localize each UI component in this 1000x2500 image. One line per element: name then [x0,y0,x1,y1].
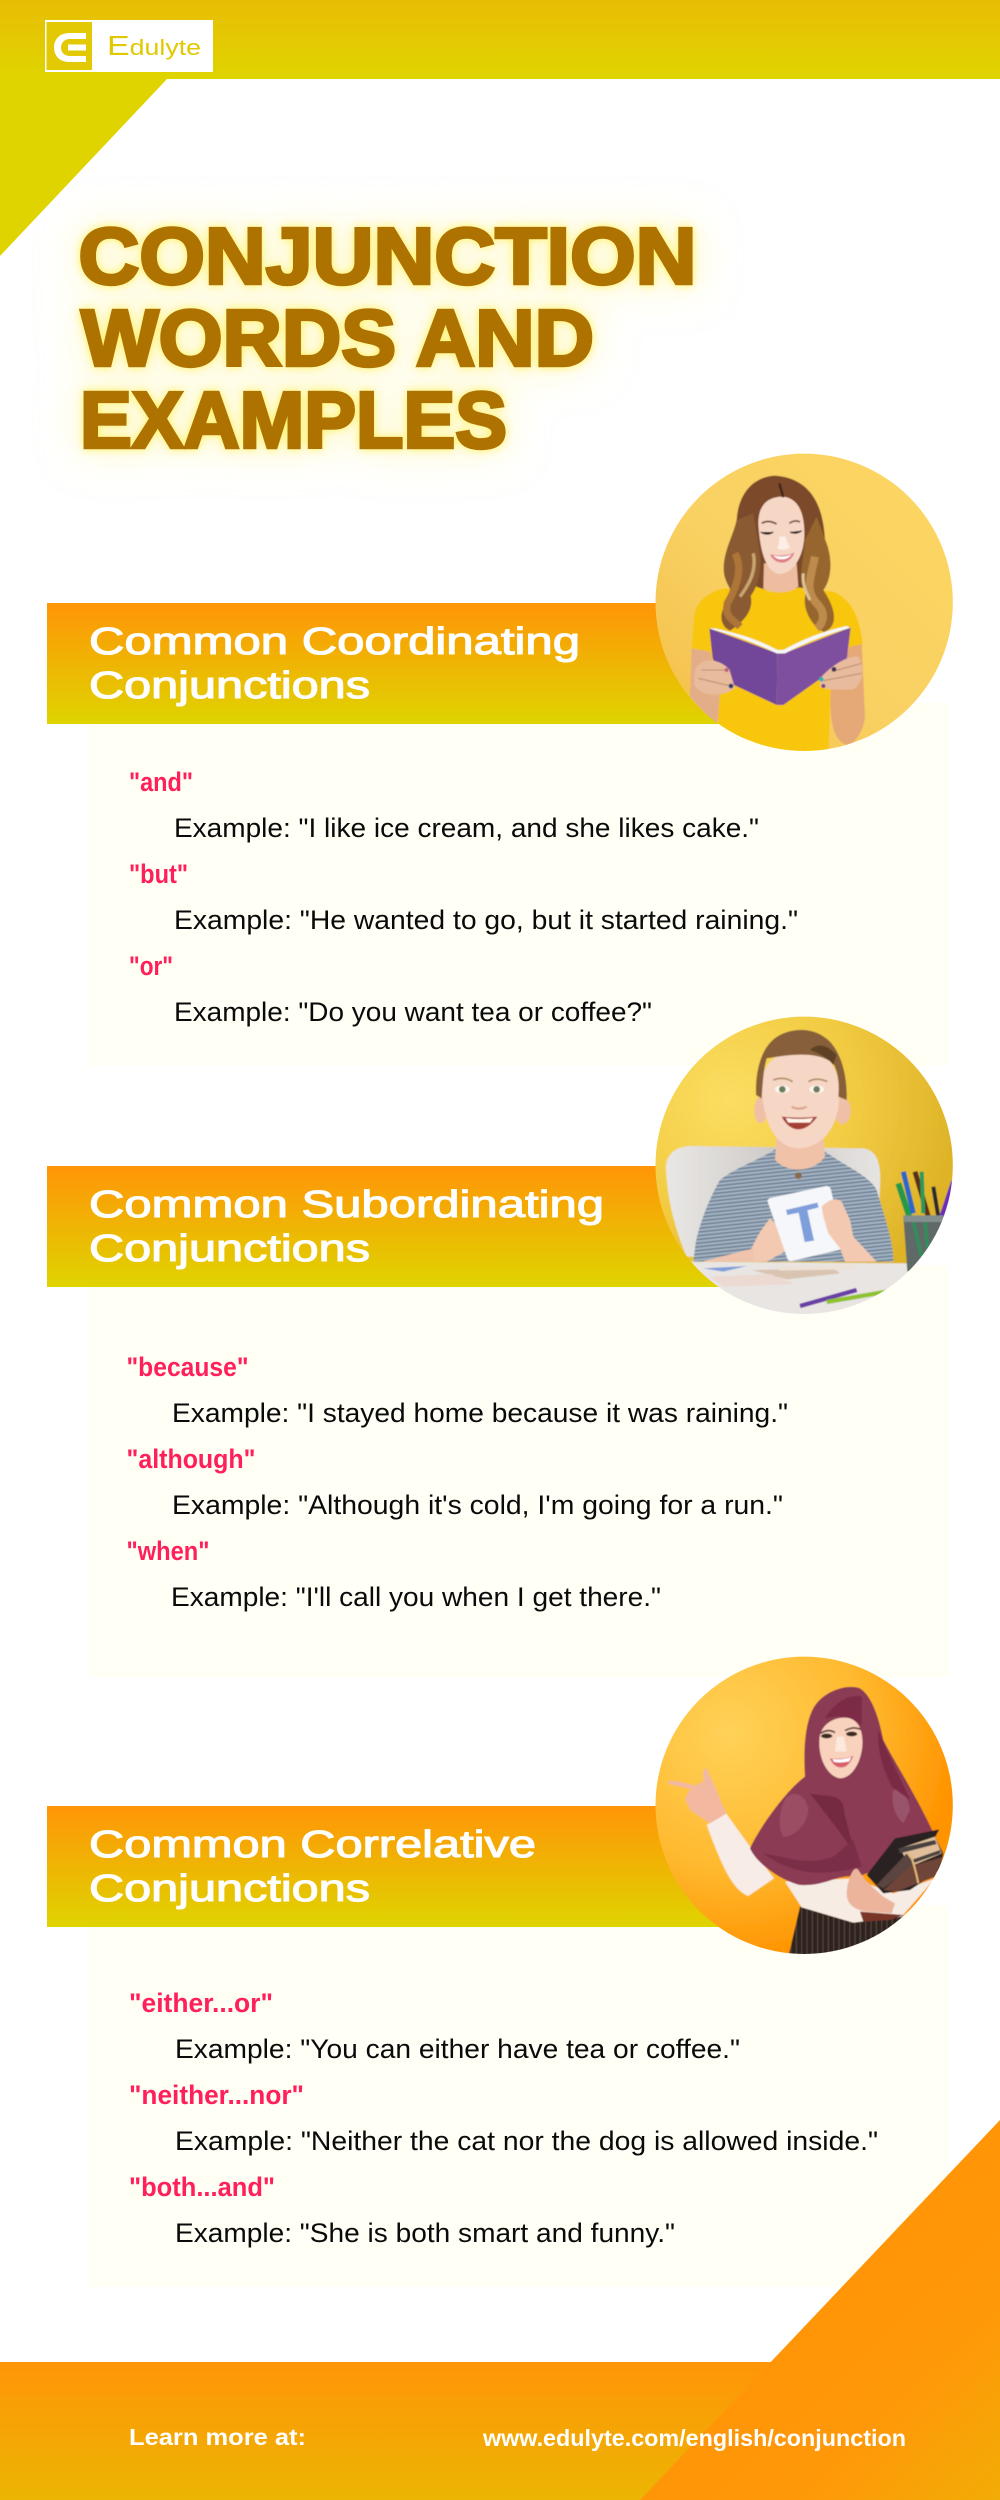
word list: correlative: "either...or" [129,1988,273,2018]
heading band: subordinating [47,1166,767,1287]
word list: coordinating: Example: "I like ice cream, and she likes cake." [174,813,759,843]
word list: correlative [129,1988,878,2248]
heading band: subordinating: Conjunctions [89,1228,370,1270]
word list: subordinating: "because" [126,1352,248,1382]
top-left corner triangle [0,79,167,256]
word list: subordinating: Example: "Although it's cold, I'm going for a run." [172,1490,783,1520]
word list: correlative: Example: "You can either have tea or coffee." [175,2034,740,2064]
header band [0,0,1000,79]
word list: correlative: Example: "She is both smart and funny." [175,2218,675,2248]
heading band: coordinating: Conjunctions [89,665,370,707]
word list: correlative: "neither...nor" [129,2080,304,2110]
heading band: coordinating: Common Coordinating [89,621,580,663]
title [78,212,696,464]
word list: correlative: Example: "Neither the cat nor the dog is allowed inside." [175,2126,878,2156]
title: CONJUNCTION [78,212,696,300]
heading band: correlative: Conjunctions [89,1868,370,1910]
word list: subordinating: "although" [126,1444,256,1474]
word list: subordinating: "when" [126,1536,210,1566]
photo: woman reading purple book [650,447,960,757]
photo: woman in hijab pointing, holding books [650,1650,960,1960]
section: correlative conjunctions [47,1650,960,2287]
logo: Edulyte: Edulyte [107,30,201,61]
title: EXAMPLES [80,376,507,464]
footer text [129,2424,906,2451]
bottom-right corner triangle [640,2120,1000,2500]
word list: coordinating: Example: "He wanted to go, but it started raining." [174,905,798,935]
logo: Edulyte [45,20,213,72]
word list: coordinating: Example: "Do you want tea or coffee?" [174,997,652,1027]
panel: correlative examples [89,1905,949,2287]
word list: subordinating [126,1352,788,1612]
title: WORDS AND [81,294,594,382]
heading band: correlative: Common Correlative [89,1824,536,1866]
section: subordinating conjunctions [47,1010,960,1677]
footer text: Learn more at: [129,2424,306,2450]
word list: coordinating: "or" [129,951,173,981]
word list: coordinating: "and" [129,767,193,797]
word list: coordinating [129,767,798,1027]
word list: correlative: "both...and" [129,2172,275,2202]
panel: subordinating examples [89,1265,949,1677]
footer text: www.edulyte.com/english/conjunction [482,2425,906,2451]
word list: subordinating: Example: "I stayed home because it was raining." [172,1398,788,1428]
word list: subordinating: Example: "I'll call you when I get there." [171,1582,661,1612]
heading band: coordinating [47,603,767,724]
section: coordinating conjunctions [47,447,960,1066]
footer band [0,2362,1000,2500]
heading band: subordinating: Common Subordinating [89,1184,604,1226]
panel: coordinating examples [89,702,949,1066]
word list: coordinating: "but" [129,859,188,889]
photo: smiling boy holding letter card [650,1010,960,1320]
heading band: correlative [47,1806,767,1927]
